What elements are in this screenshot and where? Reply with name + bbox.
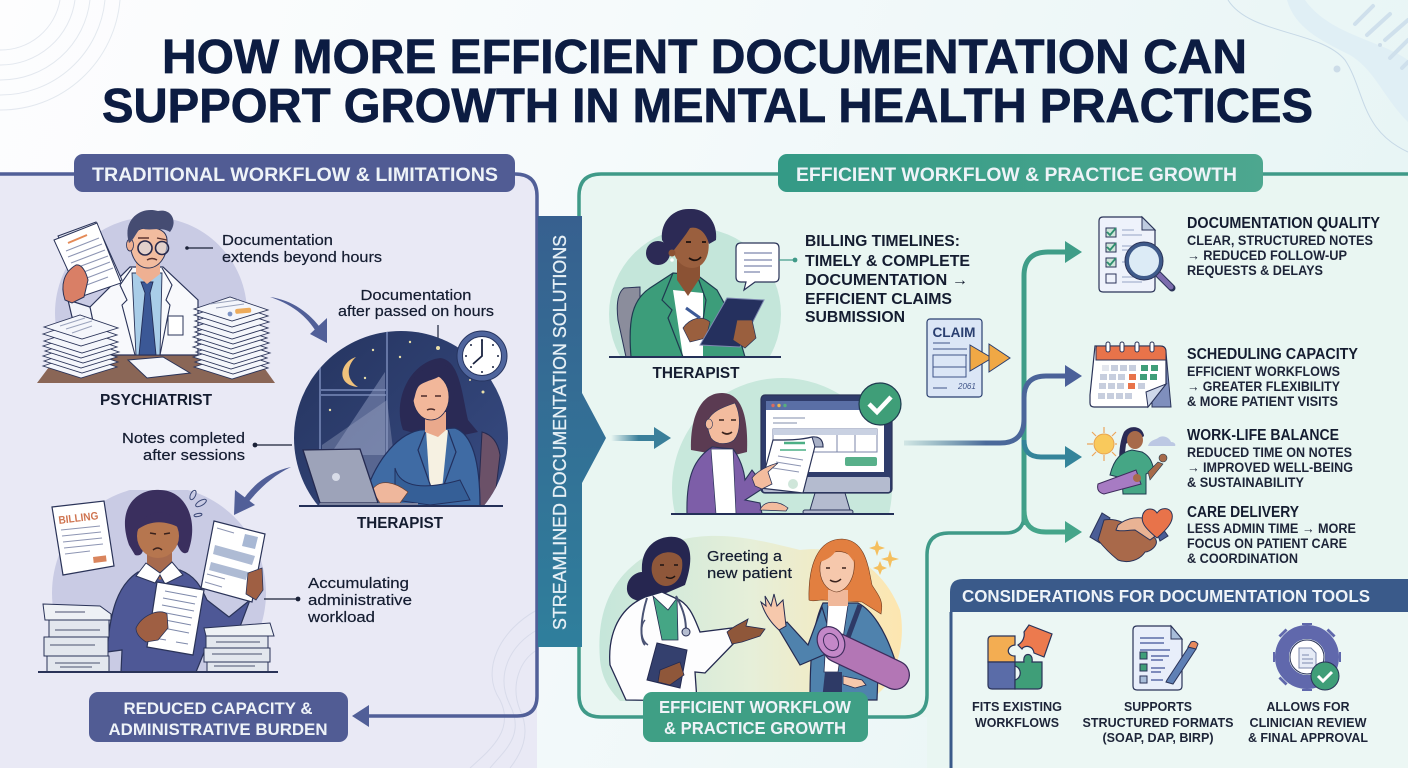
text block: billing timelines: TIMELY & COMPLETE — [805, 253, 970, 270]
collar — [136, 562, 183, 584]
title — [102, 31, 1313, 133]
text block: billing timelines: DOCUMENTATION → — [805, 272, 968, 289]
window frame — [320, 330, 387, 510]
callout: accumulating administrative workload — [264, 575, 412, 626]
shirt — [711, 449, 736, 514]
panel: efficient workflow — [579, 154, 1408, 768]
stethoscope — [641, 596, 686, 645]
text: scheduling capacity: & MORE PATIENT VISITS — [1187, 394, 1338, 409]
label: allows for clinician review: ALLOWS FOR — [1266, 699, 1350, 714]
cloud — [1148, 436, 1175, 446]
callout: accumulating administrative workload: administrative — [308, 592, 412, 609]
label: psychiatrist: PSYCHIATRIST — [100, 392, 212, 409]
illustration: therapist with tablet — [609, 209, 781, 358]
document centre — [147, 582, 204, 655]
lapel — [662, 273, 706, 357]
bag strap — [847, 605, 860, 640]
neck — [147, 552, 172, 580]
lapels — [120, 268, 172, 355]
right hand — [733, 320, 756, 348]
label: allows for clinician review: & FINAL APPROVAL — [1248, 730, 1368, 745]
text: documentation quality: DOCUMENTATION QUALITY — [1187, 215, 1381, 232]
text: scheduling capacity: SCHEDULING CAPACITY — [1187, 346, 1359, 363]
icon: work-life balance — [1087, 427, 1175, 494]
text: scheduling capacity — [1187, 346, 1359, 409]
badge — [168, 316, 183, 335]
wave decoration — [470, 610, 537, 768]
text: work-life balance: WORK-LIFE BALANCE — [1187, 427, 1339, 444]
ear and earring — [668, 250, 676, 256]
callout box: reduced capacity: ADMINISTRATIVE BURDEN — [108, 720, 328, 739]
arrow: psychiatrist to therapist — [270, 297, 327, 343]
left paper pile — [43, 604, 111, 672]
text: documentation quality: → REDUCED FOLLOW-UP — [1187, 248, 1347, 263]
flow arrows to outcomes — [904, 241, 1082, 543]
text: care delivery — [1187, 504, 1356, 566]
icon: claim form: 2061 — [957, 382, 976, 391]
face features — [421, 396, 441, 410]
heading: traditional workflow — [74, 154, 515, 192]
caption: greeting a new patient: Greeting a — [707, 548, 783, 565]
left cuff — [1090, 513, 1110, 543]
heading: considerations: CONSIDERATIONS FOR DOCUMENTATION TOOLS — [962, 586, 1370, 606]
text: care delivery: CARE DELIVERY — [1187, 504, 1300, 521]
blazer — [362, 428, 480, 506]
monitor — [761, 395, 892, 514]
tie — [139, 282, 156, 355]
sweat marks — [189, 489, 207, 517]
yoga mat — [812, 622, 895, 675]
right paper stack — [193, 297, 270, 379]
callout: notes completed after sessions: Notes completed — [122, 430, 245, 447]
arrow: to scheduling capacity — [904, 365, 1082, 443]
callout: accumulating administrative workload: workload — [307, 609, 375, 626]
baseline — [671, 513, 894, 515]
text block: billing timelines: EFFICIENT CLAIMS — [805, 291, 952, 308]
desk — [37, 355, 275, 383]
moon — [342, 357, 358, 387]
patient face — [820, 552, 854, 592]
mouth and brows — [138, 238, 167, 260]
icon: claim form — [927, 319, 1010, 397]
icon: handshake and heart — [1090, 509, 1172, 562]
callout box: reduced capacity — [89, 692, 348, 742]
neck — [677, 260, 700, 296]
caption: greeting a new patient: new patient — [707, 565, 793, 582]
doctor coat — [610, 592, 735, 701]
shirt — [132, 273, 162, 355]
neck — [136, 258, 160, 284]
face — [130, 228, 167, 268]
text: scheduling capacity: → GREATER FLEXIBILITY — [1187, 379, 1340, 394]
caption: greeting a new patient — [707, 548, 793, 582]
illustration: therapist at night — [294, 330, 508, 507]
label: supports structured formats: STRUCTURED FORMATS — [1082, 715, 1234, 730]
arm — [1148, 462, 1163, 480]
text: scheduling capacity: EFFICIENT WORKFLOWS — [1187, 364, 1340, 379]
sun — [1087, 427, 1117, 461]
face — [413, 374, 449, 420]
doctor tablet — [647, 643, 687, 688]
label: therapist: THERAPIST — [357, 515, 443, 532]
doctor hands — [658, 662, 684, 685]
pointing hand — [752, 463, 778, 489]
panel border and return arrow — [0, 174, 537, 716]
heart — [1142, 509, 1172, 538]
text block: billing timelines — [805, 233, 970, 326]
hair back — [400, 358, 478, 440]
hair — [691, 393, 747, 455]
face — [1127, 431, 1143, 449]
check badge — [859, 383, 901, 425]
blazer — [630, 273, 745, 357]
coat — [90, 267, 198, 355]
hair — [127, 210, 174, 243]
keyboard hand — [760, 502, 788, 511]
text: work-life balance: REDUCED TIME ON NOTES — [1187, 445, 1352, 460]
features — [719, 420, 736, 434]
sleeve and cuff — [68, 300, 100, 330]
heading: efficient workflow: EFFICIENT WORKFLOW & PRACTICE GROWTH — [796, 164, 1237, 186]
panel: considerations for documentation tools — [950, 579, 1408, 768]
hair — [662, 209, 716, 252]
ear — [126, 239, 134, 251]
face — [137, 514, 179, 558]
label: supports structured formats — [1082, 699, 1234, 745]
hand dark — [1098, 519, 1156, 562]
billing document: BILLING — [58, 510, 99, 527]
lapels — [418, 430, 456, 490]
neck — [828, 590, 848, 606]
illustration: overloaded staff member — [38, 490, 278, 673]
illustration: psychiatrist — [37, 210, 275, 383]
hand — [63, 265, 88, 303]
callout: documentation after passed on hours: after passed on hours — [338, 303, 494, 320]
text block: billing timelines: SUBMISSION — [805, 309, 905, 326]
label: fits existing workflows — [972, 699, 1062, 730]
hair top — [413, 374, 439, 400]
callout box: efficient workflow and practice growth: & PRACTICE GROWTH — [664, 718, 846, 738]
face — [672, 226, 709, 268]
heading: considerations — [950, 579, 1408, 612]
suit — [107, 570, 250, 672]
paper scroll — [760, 437, 823, 493]
left paper stack — [43, 315, 119, 378]
callout: notes completed after sessions: after sessions — [143, 447, 245, 464]
panel border — [579, 174, 1408, 717]
hair bun — [646, 241, 670, 265]
text: documentation quality: REQUESTS & DELAYS — [1187, 263, 1323, 278]
scrubs — [1110, 450, 1154, 494]
label: fits existing workflows: FITS EXISTING — [972, 699, 1062, 714]
text block: billing timelines: BILLING TIMELINES: — [805, 233, 960, 250]
light cone — [330, 372, 385, 455]
hand right — [246, 568, 263, 600]
text: documentation quality: CLEAR, STRUCTURED NOTES — [1187, 233, 1373, 248]
arrow: to care delivery — [1024, 510, 1082, 543]
callout box: efficient workflow and practice growth: EFFICIENT WORKFLOW — [659, 697, 851, 717]
right cuff — [1157, 529, 1168, 541]
heading: efficient workflow — [778, 154, 1263, 192]
callout: accumulating administrative workload: Accumulating — [308, 575, 409, 592]
title: SUPPORT GROWTH IN MENTAL HEALTH PRACTICES — [102, 80, 1313, 133]
hair — [125, 490, 192, 555]
arm and hands — [395, 468, 470, 505]
text: care delivery: LESS ADMIN TIME → MORE — [1187, 521, 1356, 536]
label: allows for clinician review: CLINICIAN REVIEW — [1250, 715, 1367, 730]
doctor face — [652, 552, 682, 586]
callout: notes completed after sessions — [122, 430, 292, 464]
panel: traditional workflow — [0, 154, 537, 768]
hand light — [1116, 518, 1158, 540]
yoga mat — [1098, 470, 1141, 494]
label: therapist: THERAPIST — [652, 365, 740, 382]
text: work-life balance: → IMPROVED WELL-BEING — [1187, 460, 1353, 475]
right paper pile — [204, 623, 274, 672]
blouse — [673, 290, 703, 357]
desk paper — [128, 357, 190, 378]
callout: documentation extends beyond hours — [185, 232, 382, 266]
patient shirt — [824, 605, 848, 672]
callout box: reduced capacity: REDUCED CAPACITY & — [124, 699, 312, 718]
icon: claim form: CLAIM — [932, 325, 976, 340]
chair — [478, 432, 500, 506]
neck — [425, 412, 446, 437]
hand centre — [136, 612, 168, 642]
glasses — [138, 241, 168, 255]
label: allows for clinician review — [1248, 699, 1368, 745]
desk line — [299, 505, 503, 507]
callout: documentation extends beyond hours: Documentation — [222, 232, 333, 249]
icon: gear with check — [1273, 623, 1341, 691]
icon: structured form — [1133, 626, 1198, 690]
band: streamlined documentation solutions: STREAMLINED DOCUMENTATION SOLUTIONS — [550, 235, 570, 630]
text: care delivery: FOCUS ON PATIENT CARE — [1187, 536, 1347, 551]
callout: documentation after passed on hours: Documentation — [360, 287, 472, 304]
illustration: greeting a new patient — [599, 536, 902, 701]
icon: double forward arrows — [970, 344, 1010, 372]
callout box: efficient workflow and practice growth — [643, 692, 868, 742]
label: supports structured formats: (SOAP, DAP, BIRP) — [1102, 730, 1214, 745]
heading: traditional workflow: TRADITIONAL WORKFLOW & LIMITATIONS — [92, 164, 498, 186]
patient lower hand — [843, 676, 866, 688]
icon: puzzle — [988, 625, 1052, 689]
hair — [1119, 427, 1144, 470]
text: work-life balance — [1187, 427, 1353, 490]
speech bubble icon — [736, 243, 797, 290]
text: care delivery: & COORDINATION — [1187, 551, 1298, 566]
left border — [950, 612, 952, 768]
floor line — [38, 671, 278, 673]
scrubs — [653, 596, 678, 640]
face — [708, 403, 739, 444]
callout: documentation after passed on hours — [338, 287, 494, 348]
arrow: to work-life balance — [1024, 440, 1082, 468]
ear — [706, 419, 712, 429]
patient jacket — [810, 603, 895, 700]
text: documentation quality — [1187, 215, 1381, 278]
arrow: to documentation quality — [1024, 241, 1082, 525]
features — [686, 242, 706, 260]
icon: calendar — [1090, 342, 1171, 407]
blouse — [426, 430, 448, 490]
pen hand — [683, 318, 710, 342]
arrow: solutions to workflow — [611, 427, 671, 449]
patient arm — [778, 607, 835, 665]
tablet — [700, 298, 764, 347]
billing document — [52, 501, 114, 575]
background blob — [599, 536, 902, 701]
stars — [329, 341, 484, 411]
band: streamlined documentation solutions — [538, 216, 606, 647]
label: supports structured formats: SUPPORTS — [1124, 699, 1192, 714]
blazer — [687, 447, 765, 514]
waving hand — [761, 594, 786, 630]
wall clock — [457, 331, 507, 381]
arrow: therapist to administrative workload — [234, 467, 291, 515]
text: work-life balance: & SUSTAINABILITY — [1187, 475, 1304, 490]
illustration: clinician at computer — [671, 378, 902, 515]
document right — [201, 521, 265, 602]
title: HOW MORE EFFICIENT DOCUMENTATION CAN — [162, 31, 1247, 84]
baseline — [609, 356, 781, 358]
laptop — [303, 449, 378, 503]
label: fits existing workflows: WORKFLOWS — [975, 715, 1059, 730]
chair — [617, 287, 640, 357]
doctor hair — [627, 537, 690, 601]
sparkles — [869, 540, 899, 575]
icon: documentation checklist — [1099, 217, 1172, 292]
paper held up — [54, 222, 122, 297]
patient hair — [809, 539, 882, 614]
background decoration — [0, 0, 1408, 152]
callout: documentation extends beyond hours: extends beyond hours — [222, 249, 382, 266]
